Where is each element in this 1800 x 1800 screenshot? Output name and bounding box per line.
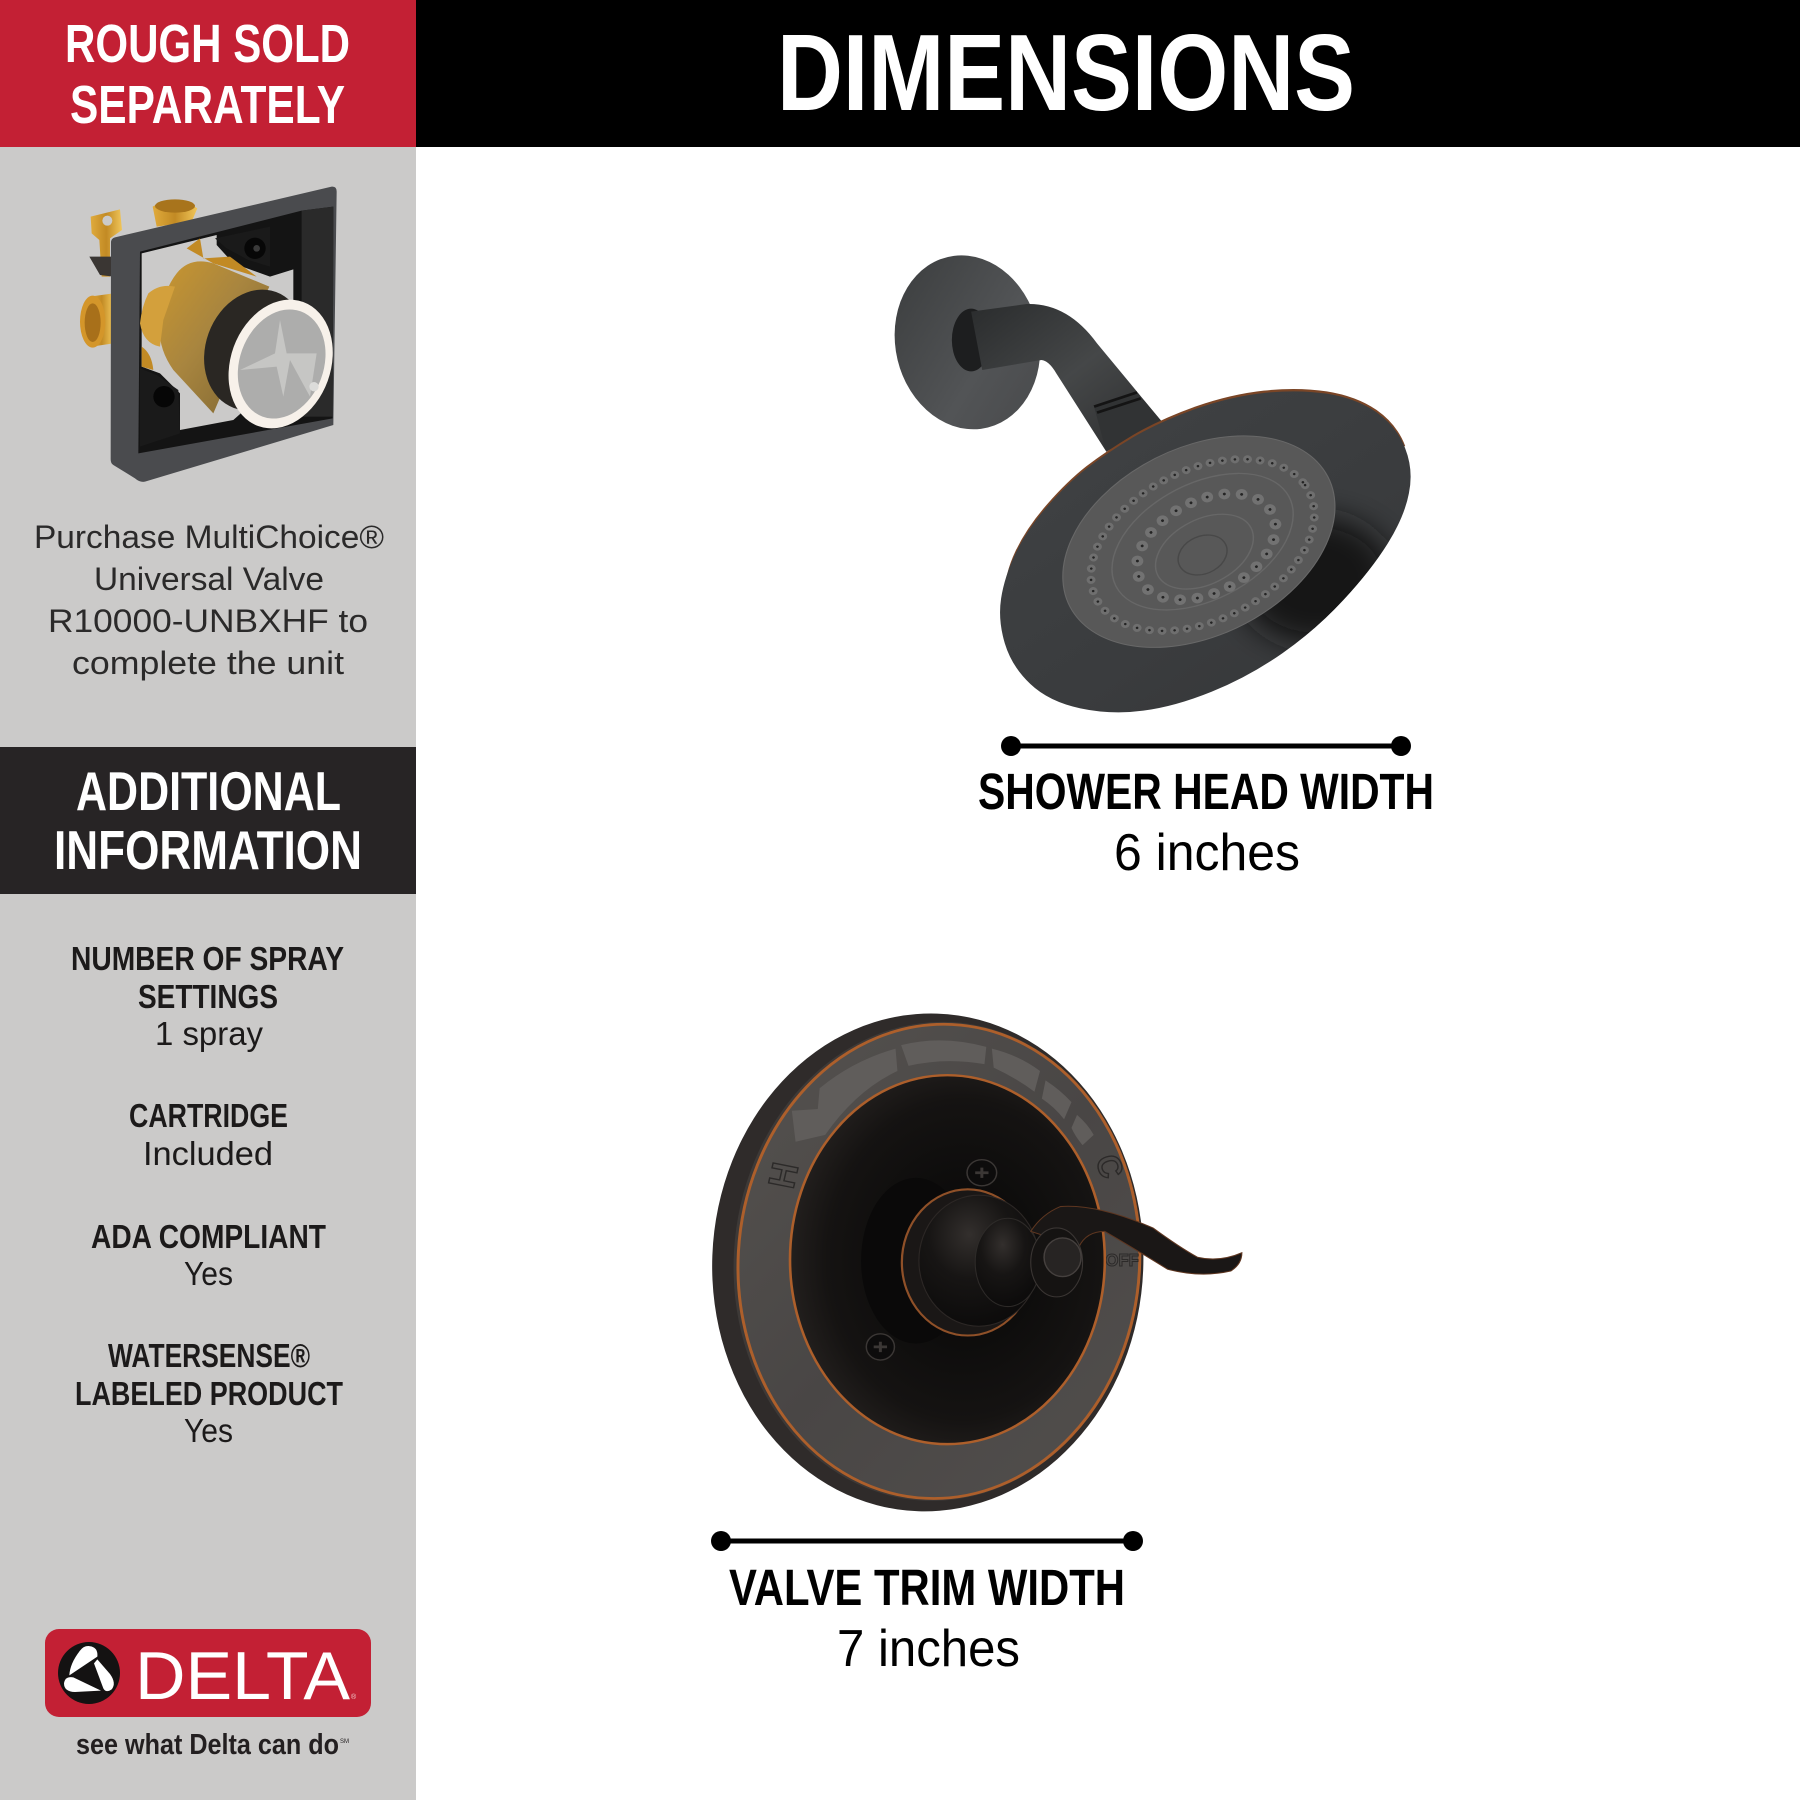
handle neck xyxy=(975,1218,1040,1307)
frame mount top-right xyxy=(215,227,270,267)
shower arm xyxy=(971,304,1162,452)
spec: cartridge: Included xyxy=(143,1135,273,1172)
label: valve trim width: VALVE TRIM WIDTH xyxy=(729,1559,1125,1616)
banner: rough sold separately: SEPARATELY xyxy=(70,75,345,135)
chrome ring xyxy=(211,285,350,443)
label: valve trim width xyxy=(729,1559,1125,1678)
spec list xyxy=(71,940,344,1449)
panel: sidebar xyxy=(0,147,416,1800)
brass valve body xyxy=(159,261,269,413)
arm collar xyxy=(1094,392,1162,452)
temperature scale marks xyxy=(792,1040,1094,1145)
title bar: dimensions xyxy=(416,0,1800,147)
label: shower head width: SHOWER HEAD WIDTH xyxy=(978,763,1434,820)
grey plug xyxy=(223,297,340,431)
icon: rough-in valve photo xyxy=(80,187,350,482)
outer nozzle ring xyxy=(1056,424,1349,666)
base shadow xyxy=(861,1178,971,1343)
head copper edge xyxy=(1004,389,1405,596)
spec: number of spray settings: SETTINGS xyxy=(138,978,278,1015)
spec: watersense labeled product: WATERSENSE® xyxy=(108,1337,310,1374)
title bar: dimensions: DIMENSIONS xyxy=(777,12,1355,134)
screw bottom xyxy=(866,1334,894,1360)
logo: delta: see what Delta can do xyxy=(76,1729,339,1761)
plate lettering: H xyxy=(761,1159,807,1192)
plate lettering xyxy=(761,1150,1131,1192)
text block: valve purchase note: complete the unit xyxy=(72,645,344,681)
logo: delta: ® xyxy=(351,1693,357,1701)
brass lugs xyxy=(140,286,175,347)
handle escutcheon xyxy=(902,1189,1034,1336)
arm collar rings xyxy=(1094,392,1141,413)
text block: valve purchase note: R10000-UNBXHF to xyxy=(48,603,368,639)
spec: number of spray settings: 1 spray xyxy=(155,1015,263,1052)
spec: number of spray settings: NUMBER OF SPRAY xyxy=(71,940,344,977)
dimension line: shower head width xyxy=(1001,736,1411,756)
banner: rough sold separately: ROUGH SOLD xyxy=(65,14,350,74)
spec: number of spray settings xyxy=(71,940,344,1052)
icon: valve trim photo: OFF xyxy=(1106,1250,1139,1270)
wall flange xyxy=(882,247,1052,438)
icon: shower head photo xyxy=(882,247,1411,712)
plate outer band xyxy=(721,1012,1154,1511)
face rings xyxy=(1084,445,1321,638)
spec: cartridge xyxy=(129,1097,288,1172)
label: valve trim width: 7 inches xyxy=(837,1620,1020,1678)
heading: additional information: ADDITIONAL xyxy=(76,760,341,822)
banner: rough sold separately xyxy=(0,0,416,147)
frame mount bottom-left xyxy=(140,368,180,447)
lever xyxy=(1031,1206,1242,1274)
window showing background xyxy=(142,235,293,430)
central dish xyxy=(790,1075,1105,1444)
label: shower head width: 6 inches xyxy=(1114,824,1300,882)
spec: ada compliant: Yes xyxy=(184,1255,233,1292)
outer plate edge xyxy=(703,1007,1153,1518)
heading: additional information: INFORMATION xyxy=(54,819,362,881)
spec: watersense labeled product: LABELED PRODUCT xyxy=(75,1375,343,1412)
brass neck xyxy=(187,238,257,277)
icon: valve trim photo xyxy=(703,1007,1242,1518)
label: shower head width xyxy=(978,763,1434,882)
spray face plate xyxy=(1019,392,1379,691)
plate rim with copper band xyxy=(725,1015,1153,1508)
plate lettering: C xyxy=(1088,1150,1131,1182)
screw top xyxy=(967,1160,997,1186)
head shadow xyxy=(1238,517,1393,643)
shower head body xyxy=(1000,391,1411,712)
spec: cartridge: CARTRIDGE xyxy=(129,1097,288,1134)
text block: valve purchase note: Purchase MultiChoice® xyxy=(34,519,384,555)
spec: ada compliant: ADA COMPLIANT xyxy=(91,1218,326,1255)
hub xyxy=(1031,1228,1083,1297)
text block: valve purchase note: Universal Valve xyxy=(94,561,324,597)
logo: delta: DELTA xyxy=(135,1638,351,1714)
hub button xyxy=(1044,1238,1081,1277)
text block: valve purchase note xyxy=(34,519,384,681)
spec: watersense labeled product xyxy=(75,1337,343,1449)
valve collar xyxy=(188,275,322,425)
dimension line: valve trim width xyxy=(711,1531,1143,1551)
brass left nipple xyxy=(90,293,113,347)
plastic frame xyxy=(111,187,337,482)
heading: additional information xyxy=(0,747,416,894)
brass top nipple xyxy=(153,200,197,260)
logo: delta xyxy=(45,1629,371,1761)
handle knob xyxy=(919,1195,1039,1326)
spec: ada compliant xyxy=(91,1218,326,1292)
brass mounting tab xyxy=(91,209,122,277)
inner nozzle ring xyxy=(1115,472,1297,622)
logo: delta: SM xyxy=(340,1739,349,1745)
spec: watersense labeled product: Yes xyxy=(184,1412,233,1449)
arm nub shadow xyxy=(952,309,990,371)
